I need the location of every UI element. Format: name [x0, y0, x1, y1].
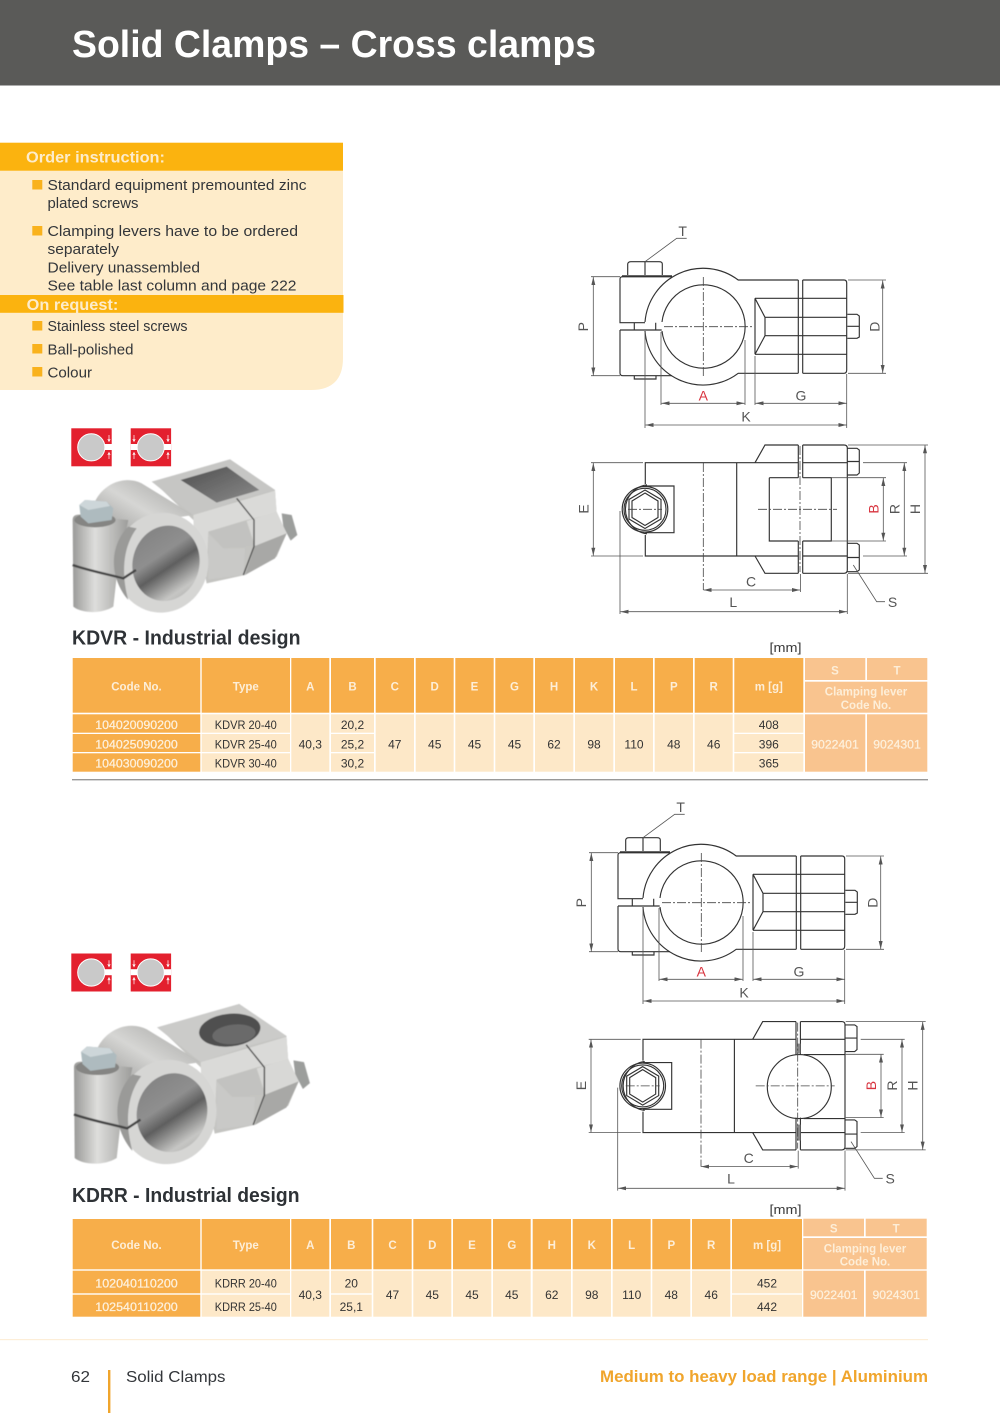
table header: Code No. — [840, 1257, 890, 1269]
dimension labels: T — [676, 799, 685, 815]
list: on request items: Ball-polished — [48, 342, 134, 358]
table body: 102040110200 — [95, 1276, 178, 1290]
table header: Clamping lever — [825, 687, 908, 699]
icon: double-sided clamping, KDRR — [131, 954, 171, 992]
table body: 47 — [386, 1288, 399, 1302]
table body: 9024301 — [872, 1288, 920, 1302]
list: on request items: Colour — [48, 365, 92, 381]
list: on request items — [32, 319, 187, 381]
dimension labels: K — [741, 408, 751, 424]
table: KDRR — [73, 1219, 927, 1317]
dimension lines — [589, 1022, 926, 1191]
dimension lines — [591, 238, 886, 428]
table header: Code No. — [111, 682, 162, 694]
table header: T — [893, 665, 901, 677]
table body: 9022401 — [810, 1288, 858, 1302]
range label: Medium to heavy load range | Aluminium — [600, 1368, 928, 1386]
dimension labels: L — [729, 594, 737, 610]
table body: 442 — [757, 1300, 777, 1314]
product photo: KDRR clamp — [74, 1004, 310, 1171]
table body: 408 — [759, 718, 779, 732]
table header: B — [348, 682, 357, 694]
dimension labels: R — [884, 1081, 900, 1091]
table body: 20,2 — [341, 718, 365, 732]
table header: R — [707, 1240, 716, 1252]
list: order instruction items: Clamping levers have to be ordered — [48, 224, 298, 240]
table header: E — [468, 1240, 476, 1252]
table header: A — [306, 1240, 314, 1252]
table body: 104020090200 — [95, 718, 178, 732]
footer — [0, 1339, 928, 1413]
table body: 62 — [545, 1288, 559, 1302]
dimension labels: C — [746, 574, 756, 590]
list: order instruction items: separately — [48, 242, 120, 258]
dimension labels — [575, 223, 882, 424]
table body: 365 — [759, 757, 779, 771]
dimension labels: H — [905, 1081, 921, 1091]
dimension labels: B — [866, 504, 882, 514]
table header: B — [347, 1240, 355, 1252]
dimension labels: B — [863, 1081, 879, 1090]
table body: 20 — [345, 1276, 358, 1290]
table body: KDRR 20-40 — [215, 1276, 277, 1290]
dimension labels: C — [744, 1150, 754, 1166]
dimension labels: E — [576, 504, 592, 514]
section name: Solid Clamps — [126, 1369, 226, 1386]
dimension labels: P — [573, 898, 589, 907]
table body: 452 — [757, 1276, 777, 1290]
dimension labels: G — [796, 388, 806, 404]
table header: Type — [233, 1240, 259, 1252]
product photo: KDVR clamp — [73, 459, 297, 619]
table body — [73, 1271, 927, 1317]
table header: S — [830, 1223, 838, 1235]
table: KDVR — [73, 658, 927, 772]
table body: 40,3 — [299, 737, 322, 751]
icon: single-sided clamping, KDRR — [71, 954, 112, 992]
table header: K — [590, 682, 599, 694]
table header: Code No. — [111, 1240, 162, 1252]
panel: order instruction — [0, 143, 344, 390]
table header: S — [831, 665, 839, 677]
table body: 45 — [426, 1288, 439, 1302]
technical drawing: KDVR side view — [576, 445, 928, 614]
subheading: KDVR: KDVR - Industrial design — [72, 628, 300, 650]
table body: 30,2 — [341, 757, 365, 771]
heading: on request: On request: — [27, 297, 118, 314]
table header: C — [388, 1240, 397, 1252]
table body: 25,2 — [341, 737, 365, 751]
table body: KDVR 20-40 — [215, 718, 277, 732]
dimension labels: H — [907, 504, 923, 514]
dimension labels: E — [573, 1081, 589, 1090]
table header: G — [510, 682, 519, 694]
heading: order instruction: Order instruction: — [26, 150, 165, 166]
table body: 110 — [622, 1288, 642, 1302]
dimension labels: G — [794, 964, 804, 980]
table body: 9022401 — [811, 737, 859, 751]
table body: 48 — [667, 737, 681, 751]
table header: A — [306, 682, 314, 694]
table header: C — [391, 682, 399, 694]
table header: m [g] — [755, 682, 783, 694]
table body: 62 — [547, 737, 561, 751]
dimension labels — [573, 799, 880, 1000]
table body: KDRR 25-40 — [215, 1300, 277, 1314]
technical drawing: KDRR top view — [573, 799, 884, 1004]
dimension labels: S — [888, 594, 897, 610]
table body: 48 — [665, 1288, 678, 1302]
dimension labels: D — [866, 322, 882, 332]
table body: 45 — [465, 1288, 479, 1302]
dimension lines — [589, 814, 884, 1004]
list: order instruction items: See table last column and page 222 — [48, 279, 296, 295]
table header: P — [667, 1240, 675, 1252]
dimension labels: P — [575, 322, 591, 331]
list: order instruction items: Standard equipment premounted zinc — [48, 178, 306, 194]
table body: 98 — [587, 737, 601, 751]
table body: 45 — [468, 737, 481, 751]
technical drawing: KDVR top view — [575, 223, 886, 428]
page number: 62 — [71, 1369, 90, 1386]
header band — [0, 0, 1000, 86]
table body: 46 — [705, 1288, 718, 1302]
list: order instruction items: plated screws — [48, 196, 138, 212]
table body: 40,3 — [299, 1288, 322, 1302]
table header: R — [710, 682, 719, 694]
list: order instruction items: Delivery unassembled — [48, 260, 200, 276]
table header: Clamping lever — [824, 1244, 907, 1256]
table body: 104025090200 — [95, 737, 178, 751]
table header: D — [431, 682, 439, 694]
dimension labels: L — [727, 1171, 735, 1187]
subheading: KDRR: KDRR - Industrial design — [72, 1185, 300, 1207]
table body: 45 — [508, 737, 521, 751]
table body: 25,1 — [340, 1300, 363, 1314]
table header: P — [670, 682, 678, 694]
table body: KDVR 30-40 — [215, 757, 277, 771]
table header: H — [550, 682, 558, 694]
technical drawing: KDRR side view — [573, 1022, 926, 1191]
dimension labels: S — [886, 1171, 895, 1187]
table body: 396 — [759, 737, 779, 751]
table header: L — [628, 1240, 635, 1252]
table header: m [g] — [753, 1240, 781, 1252]
list: on request items: Stainless steel screws — [48, 319, 188, 335]
dimension lines — [591, 445, 928, 614]
table header: L — [630, 682, 638, 694]
table body: 104030090200 — [95, 757, 178, 771]
table body: 9024301 — [873, 737, 921, 751]
unit label: [mm] — [770, 640, 802, 655]
title: Solid Clamps – Cross clamps — [72, 24, 596, 66]
unit label: [mm] — [770, 1202, 802, 1217]
table body: 98 — [585, 1288, 599, 1302]
table body: 45 — [428, 737, 442, 751]
dimension labels: A — [699, 388, 709, 404]
table header: T — [893, 1223, 900, 1235]
table header: K — [588, 1240, 597, 1252]
table body: 47 — [388, 737, 402, 751]
table body: 45 — [505, 1288, 519, 1302]
icon: single-sided clamping, KDVR — [71, 428, 112, 466]
table header — [73, 658, 927, 713]
dimension labels: T — [678, 223, 687, 239]
dimension labels — [573, 1081, 921, 1187]
table body: 102540110200 — [95, 1300, 178, 1314]
table header: H — [548, 1240, 556, 1252]
table header: E — [471, 682, 479, 694]
table header — [73, 1219, 927, 1269]
table body: KDVR 25-40 — [215, 737, 277, 751]
table header: Type — [233, 682, 259, 694]
table header: Code No. — [841, 700, 891, 712]
dimension labels — [576, 504, 923, 610]
table body — [73, 714, 927, 772]
dimension labels: R — [886, 504, 902, 514]
dimension labels: A — [697, 964, 707, 980]
list: order instruction items — [32, 178, 307, 295]
dimension labels: K — [739, 984, 749, 1000]
dimension labels: D — [864, 898, 880, 908]
icon: double-sided clamping, KDVR — [131, 428, 171, 466]
table body: 46 — [707, 737, 721, 751]
table header: D — [428, 1240, 436, 1252]
table body: 110 — [624, 737, 644, 751]
table header: G — [507, 1240, 516, 1252]
